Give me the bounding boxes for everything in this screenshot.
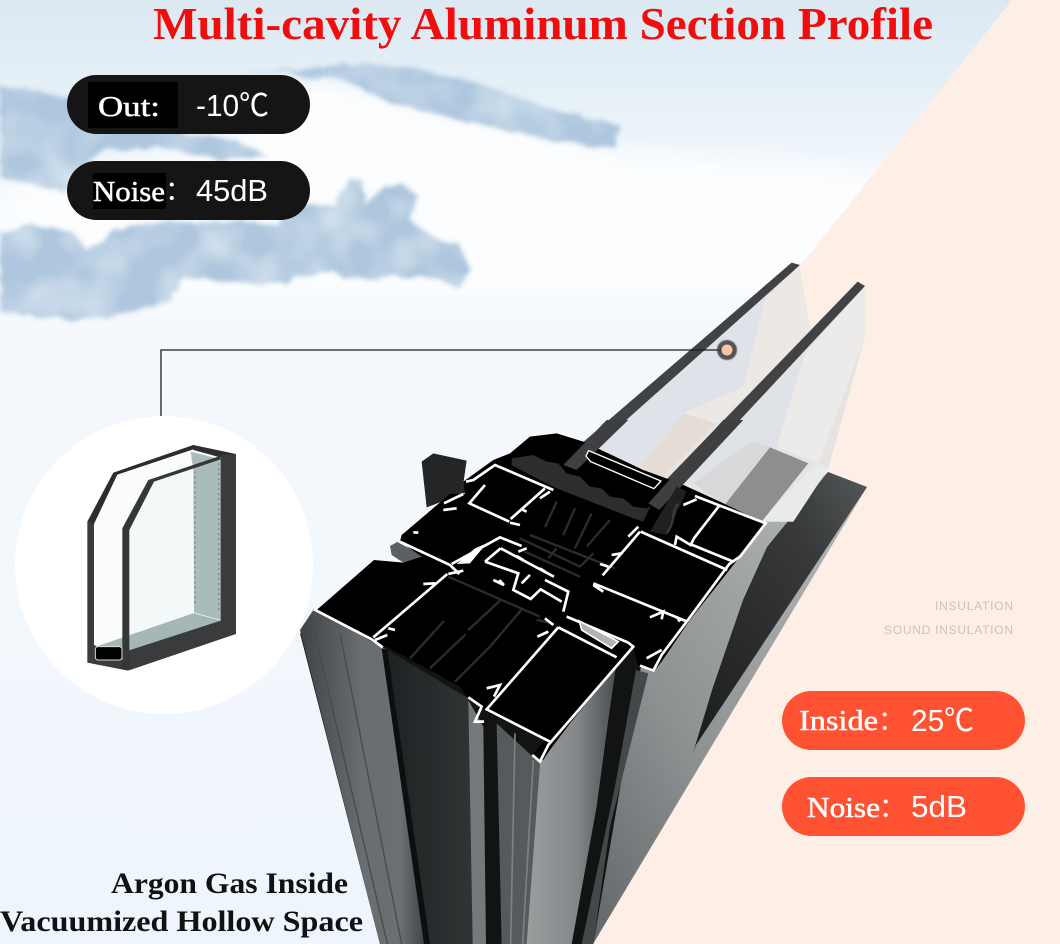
pill: outside temperature: Out:: [98, 91, 160, 123]
pill: inside temperature: [782, 691, 1025, 750]
caption: argon gas: Argon Gas Inside: [111, 867, 348, 900]
icon: double glazing corner: [87, 445, 236, 671]
profile: left flange stub: [390, 453, 468, 566]
pill: outside noise: ：: [165, 176, 192, 206]
caption: argon gas: [0, 867, 363, 938]
pill: outside noise: Noise: [93, 176, 165, 208]
right labels: insulation: INSULATION: [935, 599, 1013, 613]
pill: inside noise: [782, 777, 1025, 836]
dark window panel: [693, 472, 867, 753]
pill: inside noise: 5dB: [911, 789, 967, 824]
pill: outside noise: [67, 161, 310, 220]
pill: outside temperature: [67, 75, 310, 134]
right labels: insulation: [884, 599, 1013, 637]
section: vent slot: [579, 621, 618, 648]
section: black silhouette: [317, 433, 765, 760]
pill: inside temperature: ：: [878, 706, 905, 736]
profile: right side face: [578, 472, 867, 944]
caption: argon gas: Vacuumized Hollow Space: [0, 905, 363, 938]
pill: inside noise: Noise: [807, 792, 880, 824]
leader line: [161, 350, 726, 417]
glass panes: [562, 263, 865, 522]
pill: outside temperature: -10℃: [196, 88, 269, 123]
profile: vertical extruded faces: [300, 609, 648, 944]
section: dark thermal rail: [512, 420, 743, 535]
pill: inside temperature: Inside: [799, 705, 878, 737]
section: bright aluminium walls: [314, 465, 766, 762]
background: peach diagonal panel: [593, 0, 1060, 944]
pill: outside noise: 45dB: [196, 173, 268, 208]
right labels: insulation: SOUND INSULATION: [884, 623, 1013, 637]
pill: inside noise: ：: [879, 793, 906, 823]
leader dot: [717, 340, 737, 360]
profile: multi-cavity section: [314, 420, 766, 762]
section: insulating strut spokes: [410, 502, 615, 682]
pill: inside temperature: 25℃: [911, 703, 974, 738]
callout circle: insulated glass unit: [15, 416, 313, 714]
